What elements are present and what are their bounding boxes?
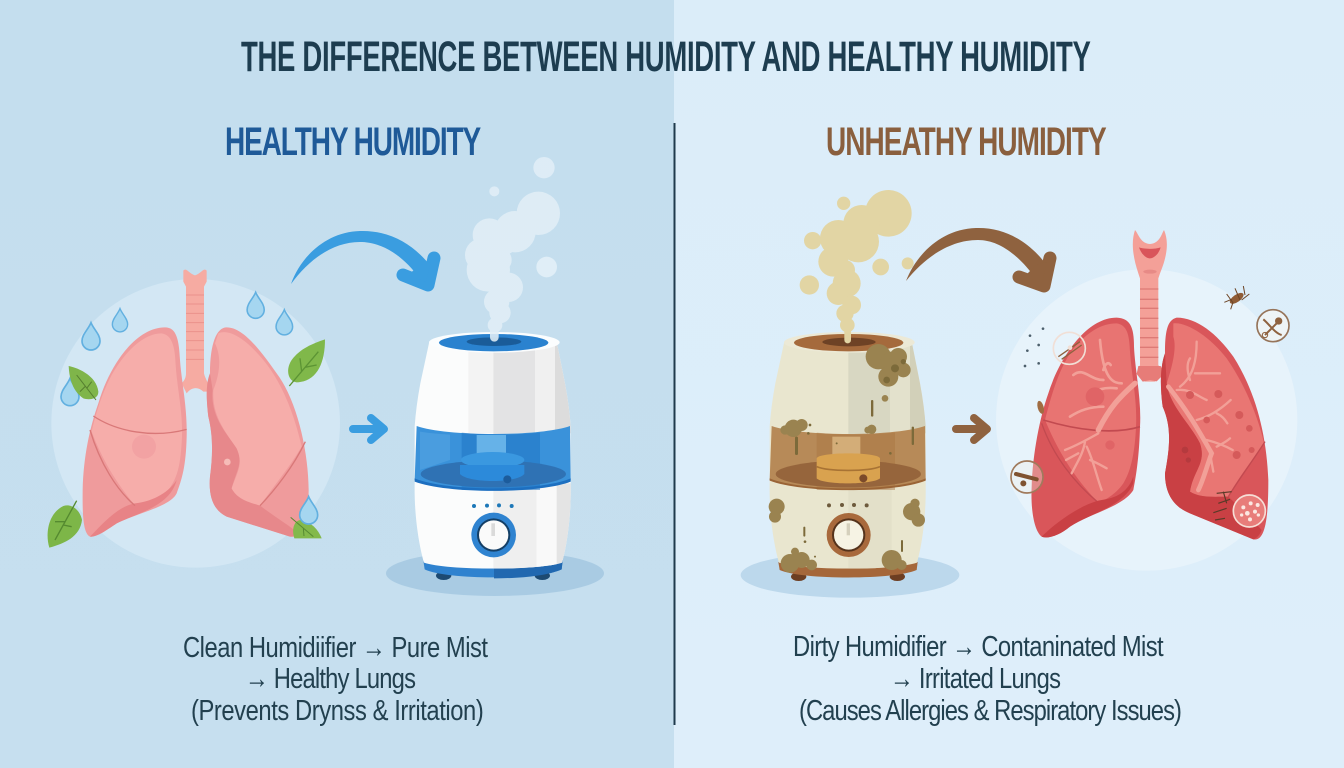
control dots [827, 503, 869, 507]
panel: unhealthy background [674, 0, 1344, 768]
caption: unhealthy: (Causes Allergies & Respiratory Issues) [799, 694, 1182, 727]
water drops [61, 292, 293, 406]
control dial [471, 513, 516, 557]
dirty humidifier [741, 332, 959, 598]
healthy lungs illustration [48, 270, 340, 568]
green leaves [48, 339, 325, 548]
heading: unhealthy humidity: UNHEATHY HUMIDITY [826, 120, 1107, 164]
icon: spore cluster circle [1213, 492, 1265, 527]
control dots [472, 503, 514, 508]
shadow [386, 551, 604, 596]
left lung lobe [1031, 318, 1140, 537]
body [770, 343, 926, 569]
left lung lobe [83, 327, 187, 537]
right lung lobe [1161, 318, 1268, 540]
base [778, 562, 918, 577]
arrow: unhealthy small arrow [956, 418, 987, 440]
caption: healthy [183, 631, 489, 727]
contaminated mist [800, 190, 914, 343]
caption: unhealthy: Dirty Humidifier → Contaninated Mist [793, 630, 1164, 663]
arrow: healthy small arrow [353, 418, 384, 440]
feet [436, 571, 451, 580]
panel: healthy background [0, 0, 674, 768]
shadow [741, 552, 959, 598]
feet [791, 572, 806, 581]
caption: unhealthy [793, 630, 1182, 727]
irritated lungs illustration [996, 230, 1297, 571]
arrow: unhealthy curved arrow [906, 228, 1050, 286]
water tank band [415, 426, 571, 489]
tank core [477, 435, 506, 458]
mold stains [769, 344, 925, 573]
base [423, 561, 563, 577]
contaminant dots [1024, 327, 1044, 367]
trachea [182, 270, 210, 393]
body [414, 342, 571, 569]
trachea [1133, 230, 1167, 382]
tank core [832, 437, 860, 458]
icon: bacteria circle [1011, 461, 1043, 493]
bronchial branches [1168, 342, 1233, 490]
control dial [827, 513, 871, 557]
center divider [674, 123, 676, 725]
bronchial branches [1065, 340, 1135, 490]
caption: healthy: (Prevents Drynss & Irritation) [191, 694, 484, 727]
water tank band [770, 426, 926, 489]
top rim [784, 332, 915, 353]
title: THE DIFFERENCE BETWEEN HUMIDITY AND HEALTHY HUMIDITY [241, 32, 1091, 81]
clean humidifier [386, 332, 604, 596]
right lung lobe [207, 327, 309, 537]
caption: healthy: Clean Humidiifier → Pure Mist [183, 631, 489, 664]
heading: healthy humidity: HEALTHY HUMIDITY [225, 120, 481, 164]
icon: mold spore circle [1257, 310, 1289, 342]
halo circle [51, 279, 340, 568]
icon: mite insect [1224, 286, 1249, 309]
icon: germ on left lobe [1053, 332, 1085, 364]
arrow: healthy curved arrow [291, 231, 434, 285]
icon: small mite [1036, 400, 1045, 415]
caption: unhealthy: → Irritated Lungs [890, 662, 1061, 695]
top rim [429, 332, 560, 353]
caption: healthy: → Healthy Lungs [245, 662, 416, 695]
clean mist [465, 157, 560, 342]
halo circle [996, 269, 1297, 571]
